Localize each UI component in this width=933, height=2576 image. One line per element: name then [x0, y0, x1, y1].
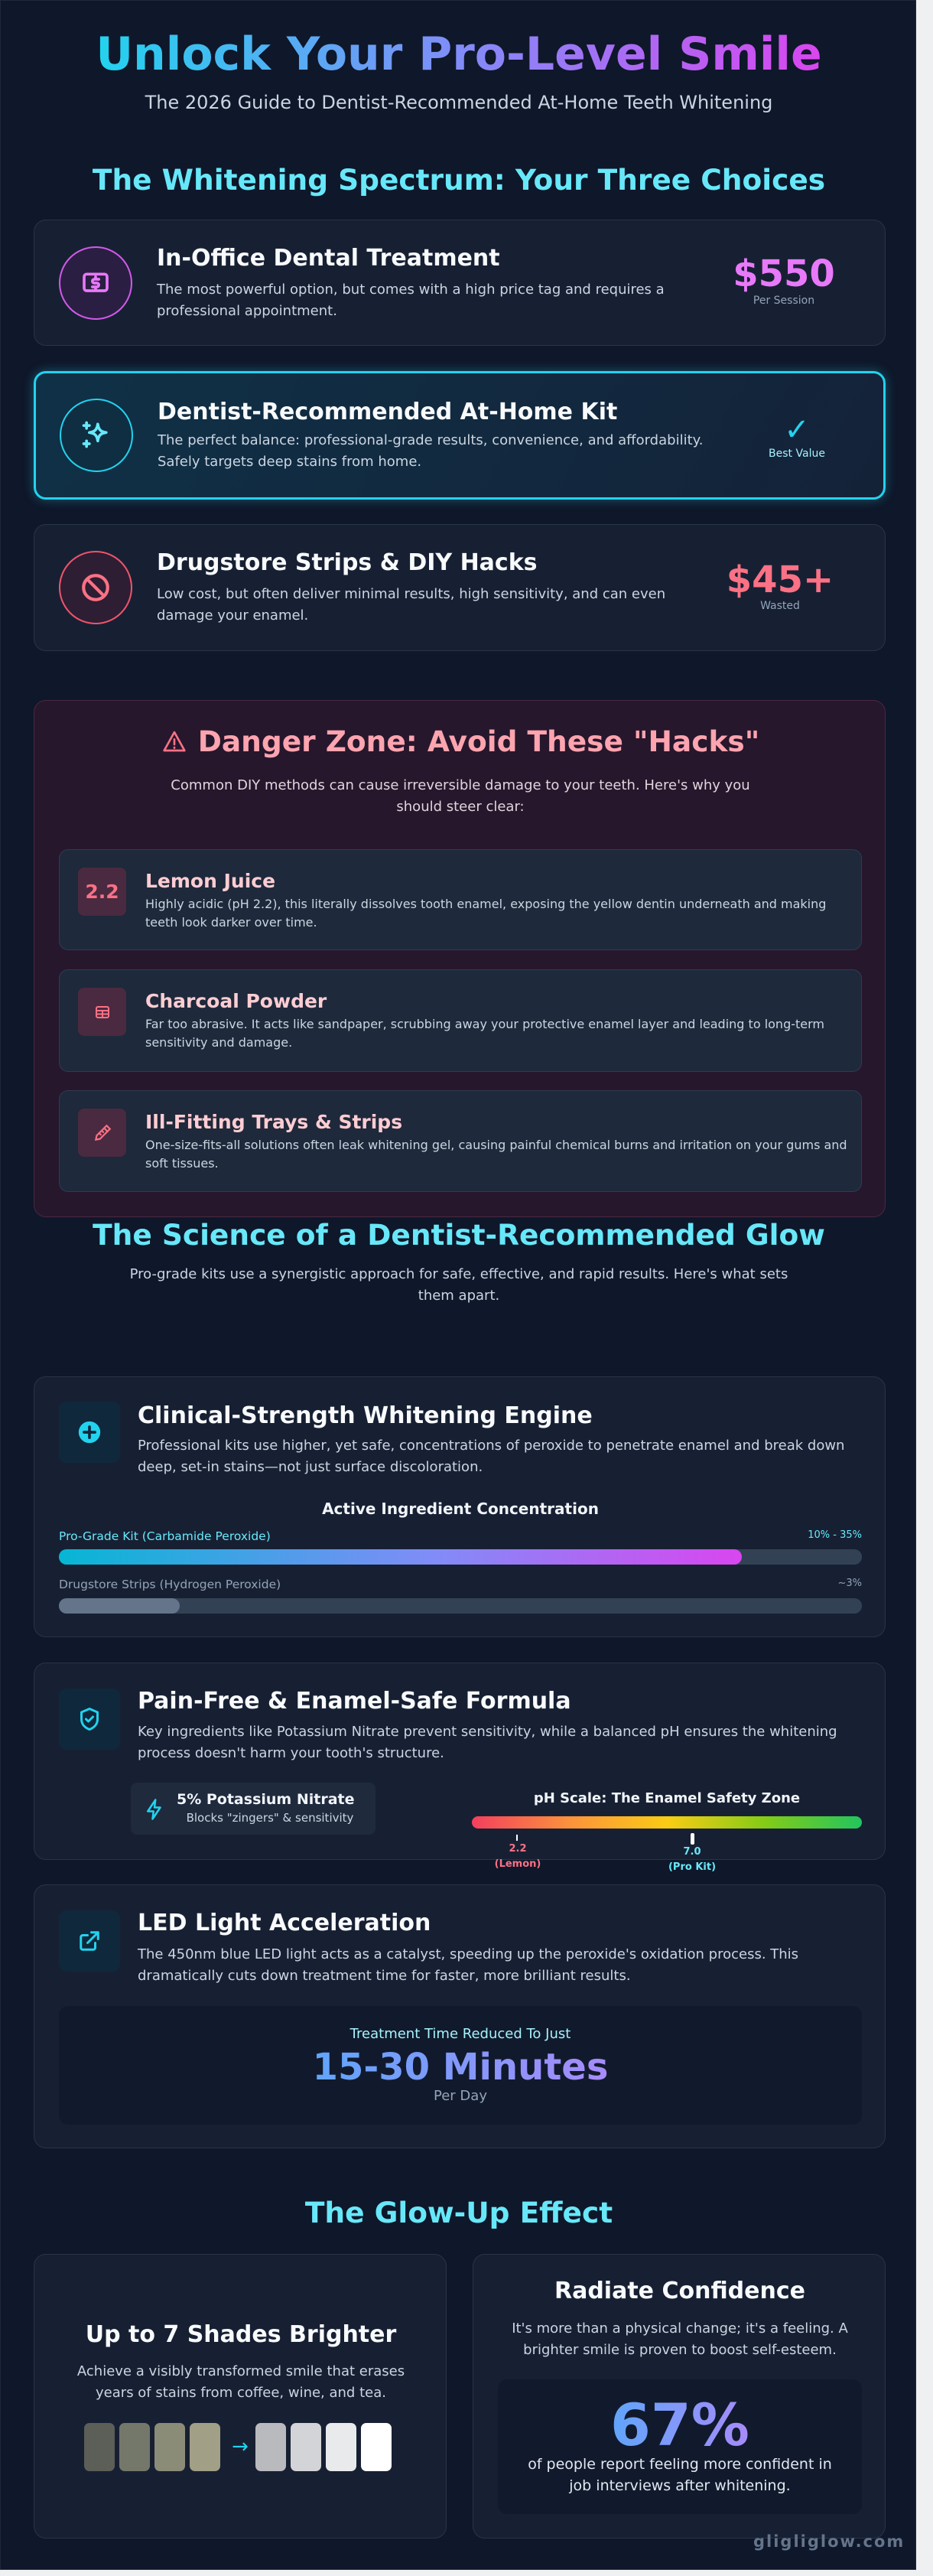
stat: 67%	[498, 2379, 862, 2514]
chart: pH scale	[472, 1790, 862, 1873]
panel: clinical strength	[34, 1376, 886, 1637]
panel: danger zone	[34, 700, 886, 1217]
panel: pain-free	[34, 1663, 886, 1860]
bar chart: concentration: 10% - 35%	[808, 1529, 862, 1541]
panel: in-office treatment: Per Session	[753, 295, 814, 307]
icon: sparkles	[60, 399, 133, 472]
subtitle: The 2026 Guide to Dentist-Recommended At-Home Teeth Whitening	[145, 92, 772, 113]
chart: shade swatches	[84, 2423, 392, 2471]
panel: clinical strength: Clinical-Strength Whitening Engine	[138, 1402, 593, 1429]
callout: treatment time	[59, 2006, 862, 2125]
item: ill-fitting trays	[59, 1090, 862, 1192]
panel: pain-free: Pain-Free & Enamel-Safe Formula	[138, 1688, 571, 1715]
icon: plus	[59, 1402, 120, 1463]
icon: external arrow	[59, 1910, 120, 1972]
panel: radiate confidence: Radiate Confidence	[554, 2278, 805, 2304]
callout: potassium nitrate: 5% Potassium Nitrate	[177, 1791, 354, 1808]
callout: treatment time: Per Day	[434, 2088, 487, 2104]
item: ill-fitting trays: One-size-fits-all solutions often leak whitening gel, causing painful chemical burns and irritation on your gums and soft tissues.	[145, 1138, 847, 1171]
callout: treatment time: 15-30 Minutes	[313, 2046, 608, 2089]
item: lemon juice	[59, 849, 862, 950]
check: best value: ✓	[784, 412, 810, 448]
panel: at-home kit	[34, 371, 886, 500]
chart: pH scale: pH Scale: The Enamel Safety Zone	[534, 1790, 800, 1806]
bar chart: concentration: Pro-Grade Kit (Carbamide Peroxide)	[59, 1529, 271, 1543]
panel: drugstore strips: Low cost, but often deliver minimal results, high sensitivity, and can even damage your enamel.	[157, 586, 665, 624]
panel: shades brighter	[34, 2254, 447, 2539]
panel: at-home kit: Dentist-Recommended At-Home Kit	[158, 399, 617, 425]
watermark: gligliglow.com	[753, 2532, 905, 2551]
panel: drugstore strips	[34, 524, 886, 651]
panel: drugstore strips: Drugstore Strips & DIY Hacks	[157, 549, 538, 576]
intro text: Common DIY methods can cause irreversible damage to your teeth. Here's why you should steer clear:	[171, 777, 750, 815]
panel: clinical strength: Professional kits use higher, yet safe, concentrations of peroxide to penetrate enamel and break down deep, set-in stains—not just surface discoloration.	[138, 1438, 844, 1475]
icon: dollar	[59, 246, 132, 320]
callout: potassium nitrate	[131, 1783, 375, 1835]
bar chart: concentration: Active Ingredient Concentration	[322, 1500, 599, 1518]
panel: LED light: LED Light Acceleration	[138, 1910, 431, 1936]
chart: pH scale: (Pro Kit)	[668, 1861, 716, 1873]
panel: in-office treatment	[34, 220, 886, 346]
item: lemon juice: Highly acidic (pH 2.2), this literally dissolves tooth enamel, exposing the yellow dentin underneath and making teeth look darker over time.	[145, 897, 826, 930]
panel: radiate confidence	[473, 2254, 886, 2539]
stat: 67%: 67%	[610, 2391, 749, 2459]
price: $550	[733, 252, 835, 295]
chart: pH scale: 7.0	[683, 1846, 701, 1858]
stat: 67%: of people report feeling more confident in job interviews after whitening.	[528, 2456, 832, 2494]
bar chart: concentration: ~3%	[837, 1578, 862, 1589]
heading: glow-up effect: The Glow-Up Effect	[305, 2196, 613, 2229]
panel: shades brighter: Up to 7 Shades Brighter	[86, 2321, 396, 2348]
panel: at-home kit: Best Value	[769, 448, 825, 460]
chart: shade swatches: →	[232, 2435, 249, 2458]
chart: pH scale: (Lemon)	[495, 1858, 541, 1870]
chart: pH scale: 2.2	[509, 1843, 527, 1855]
panel: shades brighter: Achieve a visibly transformed smile that erases years of stains from coffee, wine, and tea.	[77, 2363, 405, 2401]
heading: danger zone: Danger Zone: Avoid These "Hacks"	[198, 725, 759, 758]
callout: potassium nitrate: Blocks "zingers" & sensitivity	[187, 1811, 353, 1825]
text: In-Office Dental Treatment	[157, 245, 500, 272]
item: charcoal powder	[59, 969, 862, 1072]
icon: shield	[59, 1689, 120, 1750]
heading: whitening spectrum: The Whitening Spectrum: Your Three Choices	[93, 163, 825, 197]
panel: at-home kit: The perfect balance: professional-grade results, convenience, and affordability. Safely targets deep stains from home.	[158, 432, 703, 470]
callout: treatment time: Treatment Time Reduced To Just	[350, 2026, 571, 2042]
panel: in-office treatment: The most powerful option, but comes with a high price tag and requires a professional appointment.	[157, 282, 665, 319]
item: charcoal powder: Far too abrasive. It acts like sandpaper, scrubbing away your protective enamel layer and leading to long-term sensitivity and damage.	[145, 1017, 824, 1050]
panel: LED light: The 450nm blue LED light acts as a catalyst, speeding up the peroxide's oxidation process. This dramatically cuts down treatment time for faster, more brilliant results.	[138, 1946, 798, 1984]
bar chart: concentration: Drugstore Strips (Hydrogen Peroxide)	[59, 1578, 281, 1591]
science intro: Pro-grade kits use a synergistic approach for safe, effective, and rapid results. Here's what sets them apart.	[130, 1266, 788, 1304]
item: lemon juice: 2.2	[85, 881, 119, 903]
icon: ban	[59, 551, 132, 624]
heading: science: The Science of a Dentist-Recommended Glow	[93, 1218, 825, 1252]
panel: drugstore strips: Wasted	[760, 600, 800, 612]
price: wasted: $45+	[727, 559, 834, 601]
item: ill-fitting trays: Ill-Fitting Trays & Strips	[145, 1111, 402, 1133]
panel: pain-free: Key ingredients like Potassium Nitrate prevent sensitivity, while a balanced pH ensures the whitening process doesn't harm your tooth's structure.	[138, 1724, 837, 1761]
panel: radiate confidence: It's more than a physical change; it's a feeling. A brighter smile is proven to boost self-esteem.	[512, 2320, 848, 2358]
title: Unlock Your Pro-Level Smile	[96, 28, 822, 81]
bar chart: concentration	[59, 1500, 862, 1614]
item: charcoal powder: Charcoal Powder	[145, 990, 327, 1012]
panel: LED light	[34, 1884, 886, 2148]
item: lemon juice: Lemon Juice	[145, 870, 275, 892]
